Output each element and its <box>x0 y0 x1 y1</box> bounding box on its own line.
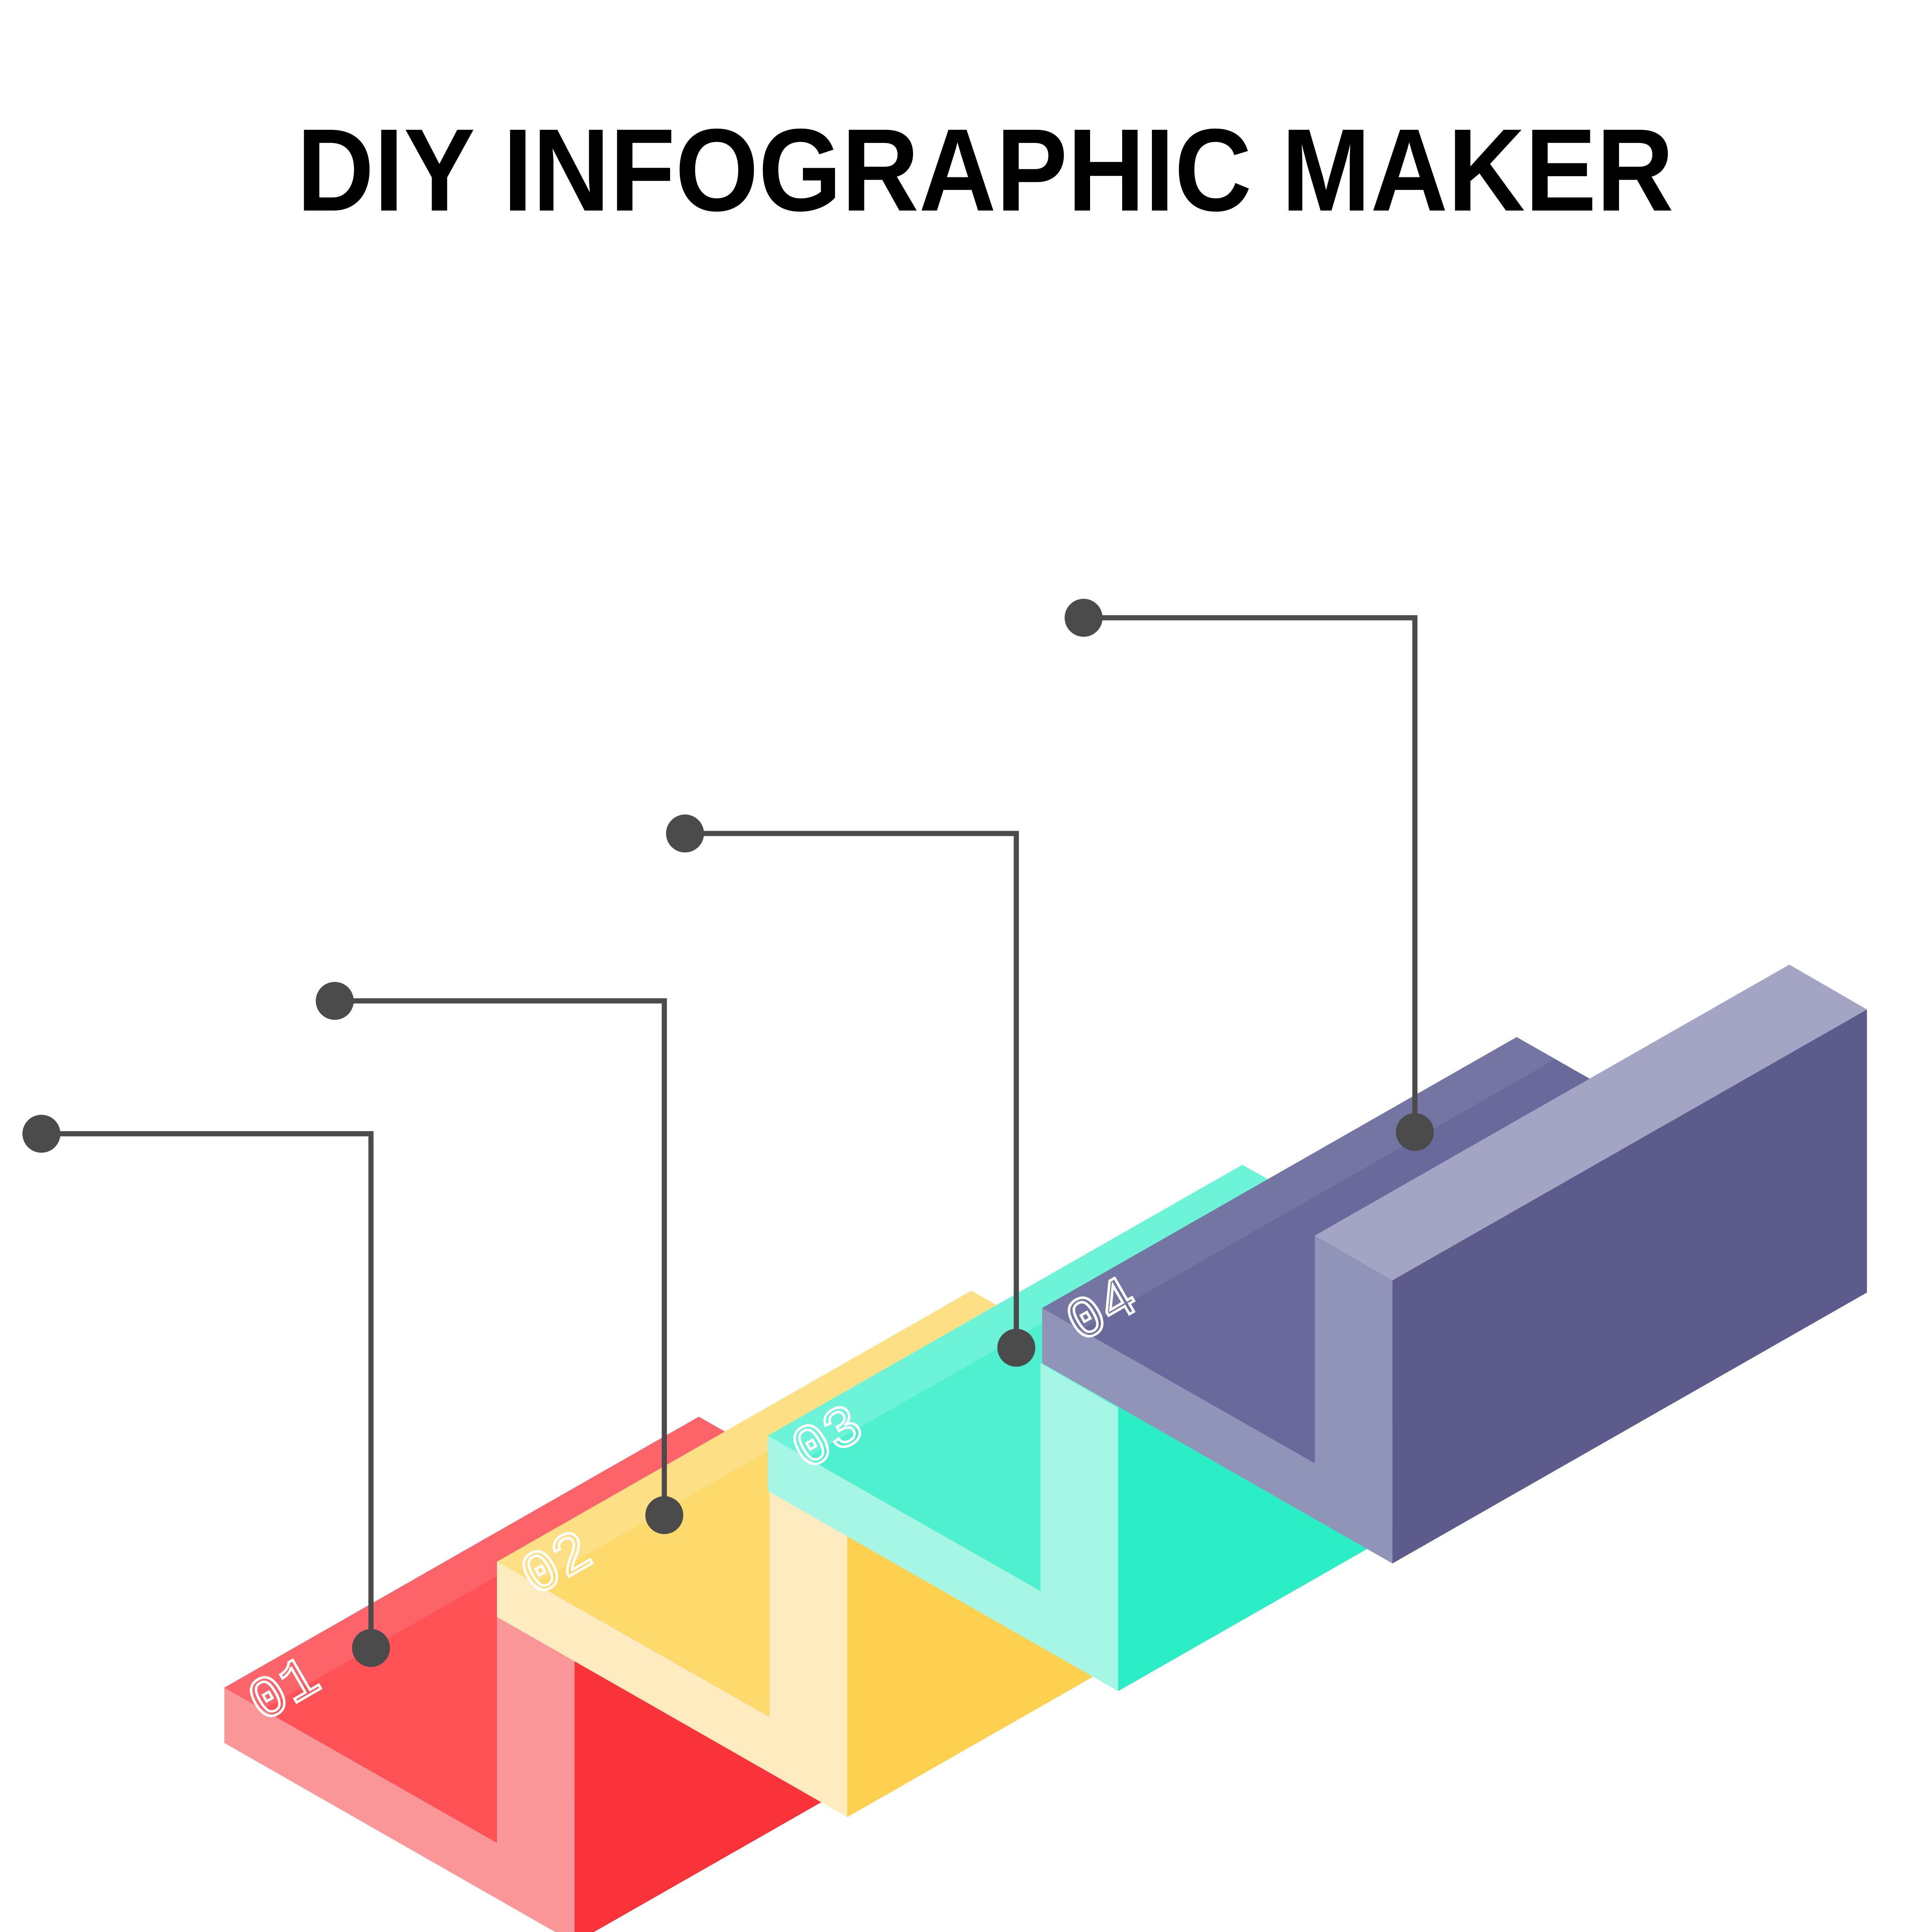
callout line 4 <box>1065 599 1434 1151</box>
step 02 yellow <box>497 1218 1322 1817</box>
title: DIY INFOGRAPHIC MAKER <box>297 105 1674 236</box>
callout line 3 <box>666 815 1035 1367</box>
step 01 red <box>224 1344 1049 1932</box>
callout line 1 <box>22 1115 390 1667</box>
step 04 purple: 04 <box>1056 1265 1150 1358</box>
step 03 teal <box>768 1092 1593 1691</box>
step 01 red: 01 <box>238 1645 332 1738</box>
step 04 purple <box>1042 964 1867 1563</box>
callout line 2 <box>316 982 683 1534</box>
step 02 yellow: 02 <box>510 1519 605 1612</box>
step 03 teal: 03 <box>781 1393 876 1486</box>
